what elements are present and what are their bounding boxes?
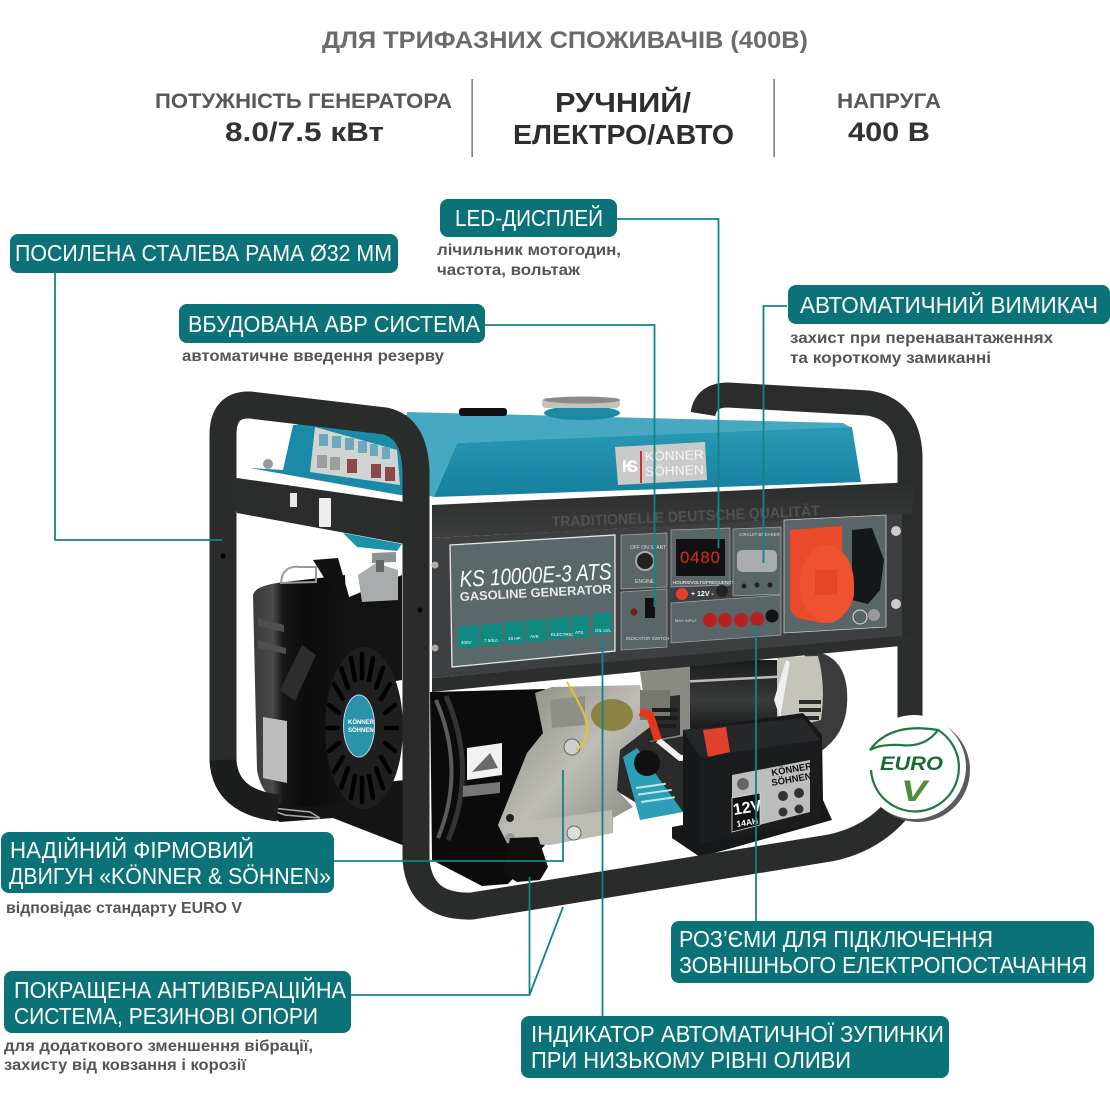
callout: circuit breaker: АВТОМАТИЧНИЙ ВИМИКАЧ bbox=[800, 291, 1098, 318]
callout: oil level indicator: ІНДИКАТОР АВТОМАТИЧНОЇ ЗУПИНКИ bbox=[531, 1021, 944, 1047]
EURO V badge: V bbox=[901, 775, 931, 808]
callout: external power sockets bbox=[671, 921, 1094, 983]
black engine shroud bbox=[342, 575, 402, 690]
model plate: GASOLINE GENERATOR bbox=[459, 582, 612, 604]
left crossbar bbox=[230, 477, 405, 544]
model plate: ATS bbox=[575, 630, 583, 635]
callout: LED display: LED-ДИСПЛЕЙ bbox=[455, 204, 603, 231]
model plate: OIL LVL bbox=[595, 628, 612, 633]
callout: external power sockets: ЗОВНІШНЬОГО ЕЛЕКТРОПОСТАЧАННЯ bbox=[679, 952, 1087, 978]
callout: LED display: частота, вольтаж bbox=[437, 262, 581, 279]
model plate: 400V bbox=[461, 640, 472, 645]
fuse row bbox=[671, 595, 781, 643]
spec: generator power: 8.0/7.5 кВт bbox=[225, 117, 384, 147]
callout: steel frame bbox=[10, 234, 398, 273]
spec: start type bbox=[513, 86, 734, 150]
brand badge: KÖNNER bbox=[645, 447, 704, 464]
socket panel bbox=[784, 515, 886, 633]
battery label: SÖHNEN bbox=[771, 771, 813, 789]
key switch panel: OFF ON START bbox=[630, 545, 666, 551]
fan housing and base bbox=[430, 689, 545, 886]
12V terminals: + 12V - bbox=[691, 591, 714, 598]
recoil starter: KÖNNER bbox=[348, 719, 375, 726]
muffler tank bbox=[253, 558, 353, 818]
callout: oil level indicator bbox=[521, 1016, 949, 1078]
brand badge bbox=[615, 442, 707, 485]
feature icons bbox=[458, 612, 611, 648]
callout: ATS system bbox=[179, 304, 485, 365]
sticker panel bbox=[310, 427, 400, 485]
callout: steel frame: ПОСИЛЕНА СТАЛЕВА РАМА Ø32 ММ bbox=[15, 240, 392, 266]
callout: anti-vibration: захисту від ковзання і корозії bbox=[4, 1057, 247, 1074]
battery label: KÖNNER bbox=[771, 761, 813, 779]
embossed slogan: TRADITIONELLE DEUTSCHE QUALITÄT bbox=[551, 503, 820, 531]
red socket bbox=[790, 526, 854, 623]
circuit breaker: CIRCUIT BREAKER bbox=[739, 532, 781, 537]
brand badge: SÖHNEN bbox=[645, 462, 704, 479]
warning sticker bbox=[463, 743, 502, 797]
left base plate bbox=[262, 780, 410, 848]
model plate: KS 10000E-3 ATS bbox=[459, 558, 613, 592]
battery label bbox=[732, 760, 813, 832]
spec: voltage: 400 В bbox=[848, 117, 930, 147]
battery label: 14AH bbox=[736, 816, 759, 829]
spec: voltage bbox=[837, 90, 941, 147]
key switch panel: ENGINE bbox=[635, 579, 655, 585]
left frame lower bend bbox=[223, 760, 278, 808]
key switch panel bbox=[621, 533, 667, 589]
fuel cap bbox=[459, 396, 620, 420]
callout: external power sockets: РОЗ’ЄМИ ДЛЯ ПІДКЛЮЧЕННЯ bbox=[679, 926, 993, 952]
callout: engine bbox=[1, 832, 334, 917]
model plate bbox=[450, 535, 615, 667]
model plate: AVR bbox=[530, 634, 540, 639]
callout: circuit breaker: та короткому замиканні bbox=[790, 350, 991, 367]
EURO V badge: EURO bbox=[880, 754, 943, 775]
black socket bbox=[852, 528, 884, 604]
brand badge: KS bbox=[622, 457, 638, 476]
spec: start type: РУЧНИЙ/ bbox=[555, 86, 691, 118]
control panel backing bbox=[432, 514, 902, 678]
model plate: ELECTRIC bbox=[551, 632, 574, 637]
callout: oil level indicator: ПРИ НИЗЬКОМУ РІВНІ ОЛИВИ bbox=[531, 1047, 851, 1073]
spec: start type: ЕЛЕКТРО/АВТО bbox=[513, 119, 734, 150]
fuse row: MAX INPUT bbox=[675, 618, 697, 623]
callout: circuit breaker bbox=[788, 285, 1110, 367]
LED display: 0480 bbox=[680, 548, 720, 567]
ATS switch panel: INDICATOR SWITCH bbox=[626, 636, 669, 641]
engine block bbox=[498, 682, 722, 845]
circuit breaker bbox=[733, 527, 781, 596]
title: ДЛЯ ТРИФАЗНИХ СПОЖИВАЧІВ (400В) bbox=[322, 27, 808, 54]
callout: engine: відповідає стандарту EURO V bbox=[6, 900, 243, 917]
battery label: 12V bbox=[732, 798, 763, 819]
recoil starter bbox=[325, 647, 403, 809]
callout: anti-vibration: СИСТЕМА, РЕЗИНОВІ ОПОРИ bbox=[14, 1003, 318, 1029]
12V terminals bbox=[676, 585, 728, 600]
fuel cock bbox=[358, 552, 398, 602]
LED display: HOURS/VOLTS/FREQUENCY bbox=[673, 580, 734, 585]
muffler warning sticker bbox=[263, 717, 287, 783]
callout: engine: НАДІЙНИЙ ФІРМОВИЙ bbox=[10, 836, 254, 863]
model plate: 7.5/8.0 bbox=[484, 638, 498, 643]
battery bbox=[672, 713, 832, 857]
callout: ATS system: автоматичне введення резерву bbox=[182, 348, 444, 365]
leader lines bbox=[55, 219, 787, 1016]
recoil starter: SÖHNEN bbox=[348, 727, 374, 734]
callout: engine: ДВИГУН «KÖNNER & SÖHNEN» bbox=[9, 863, 331, 889]
ATS switch panel bbox=[621, 589, 669, 650]
callout: anti-vibration bbox=[4, 971, 351, 1074]
fuel tank bbox=[250, 396, 861, 497]
control band bbox=[432, 482, 914, 538]
rubber foot bbox=[503, 837, 548, 882]
callout: anti-vibration: ПОКРАЩЕНА АНТИВІБРАЦІЙНА bbox=[14, 976, 347, 1003]
callout: LED display: лічильник мотогодин, bbox=[437, 242, 621, 259]
illustration: petrol generator bbox=[220, 395, 914, 906]
spec: generator power: ПОТУЖНІСТЬ ГЕНЕРАТОРА bbox=[155, 90, 452, 113]
spec: voltage: НАПРУГА bbox=[837, 90, 941, 113]
LED display bbox=[671, 528, 734, 587]
callout: anti-vibration: для додаткового зменшення вібрації, bbox=[4, 1038, 313, 1055]
tag: safety label bbox=[623, 748, 683, 820]
front frame tube bbox=[223, 405, 908, 906]
callout: LED display bbox=[437, 199, 621, 279]
lower strip bbox=[432, 635, 910, 692]
model plate: 18 HP bbox=[508, 636, 521, 641]
alternator bbox=[640, 652, 847, 752]
rear frame tube bbox=[703, 395, 910, 800]
callout: ATS system: ВБУДОВАНА АВР СИСТЕМА bbox=[188, 311, 481, 337]
EURO V badge bbox=[862, 715, 970, 822]
engine backdrop bbox=[615, 690, 700, 812]
callout: circuit breaker: захист при перенавантаженнях bbox=[790, 330, 1053, 347]
spec: generator power bbox=[155, 90, 452, 147]
